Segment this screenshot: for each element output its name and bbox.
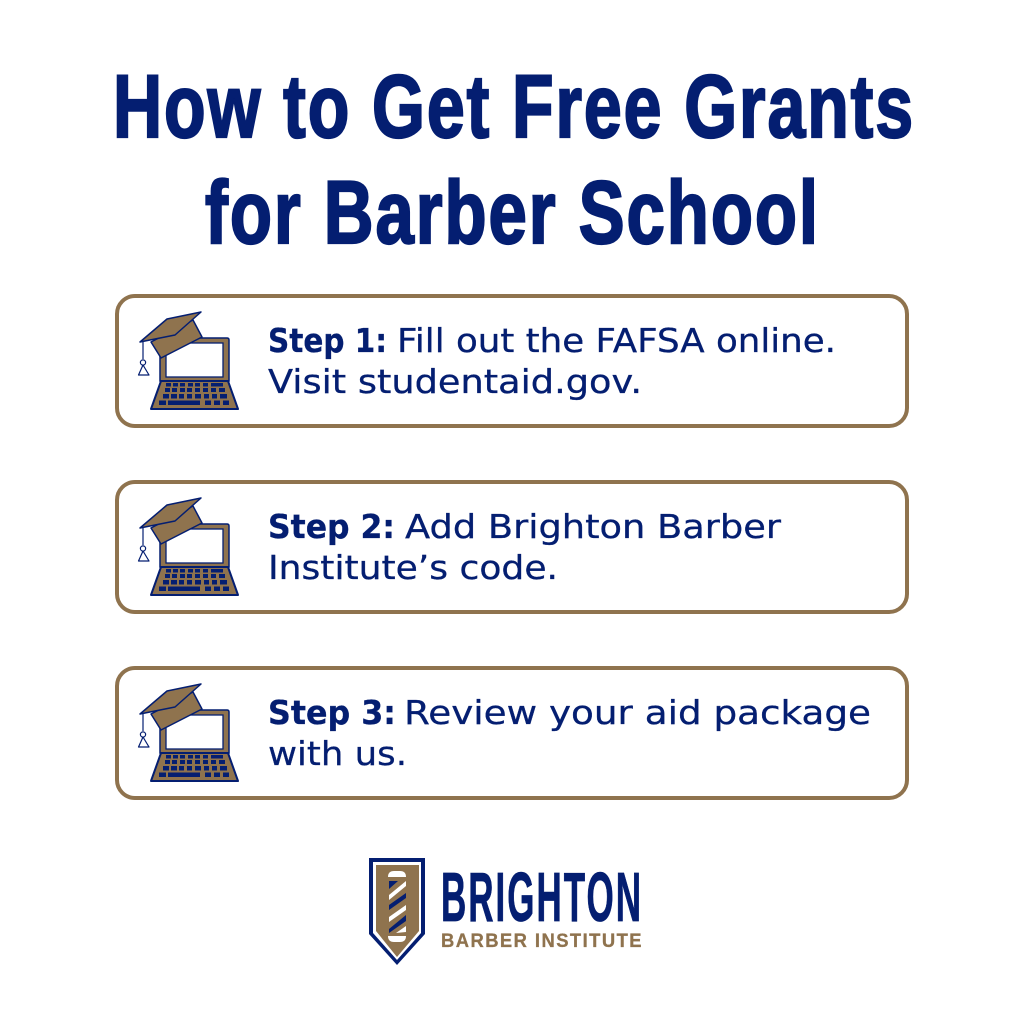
text: step 3: Review your aid package xyxy=(404,693,871,732)
title xyxy=(113,56,915,262)
text: step 2 xyxy=(268,507,781,587)
text: BRIGHTON xyxy=(441,858,643,936)
panel: step 1 xyxy=(117,296,907,426)
text: step 1: Fill out the FAFSA online. xyxy=(397,321,836,360)
text: step 1 xyxy=(268,321,836,401)
icon: graduation cap on laptop xyxy=(138,498,238,595)
text: step 2: Institute’s code. xyxy=(268,548,558,587)
panel: step 3 xyxy=(117,668,907,798)
text: step 3 xyxy=(268,693,871,773)
logo: Brighton Barber Institute xyxy=(369,858,643,965)
text: step 1: Step 1: xyxy=(268,321,387,360)
text: step 3: with us. xyxy=(268,734,407,773)
text: step 2: Step 2: xyxy=(268,507,395,546)
text: step 3: Step 3: xyxy=(268,693,396,732)
text: step 2: Add Brighton Barber xyxy=(405,507,781,546)
text: step 1: Visit studentaid.gov. xyxy=(268,362,642,401)
title: for Barber School xyxy=(205,162,820,262)
icon: graduation cap on laptop xyxy=(138,684,238,781)
panel: step 2 xyxy=(117,482,907,612)
icon: shield with barber pole xyxy=(369,858,425,965)
icon: graduation cap on laptop xyxy=(138,312,238,409)
tagline: BARBER INSTITUTE xyxy=(441,931,643,952)
